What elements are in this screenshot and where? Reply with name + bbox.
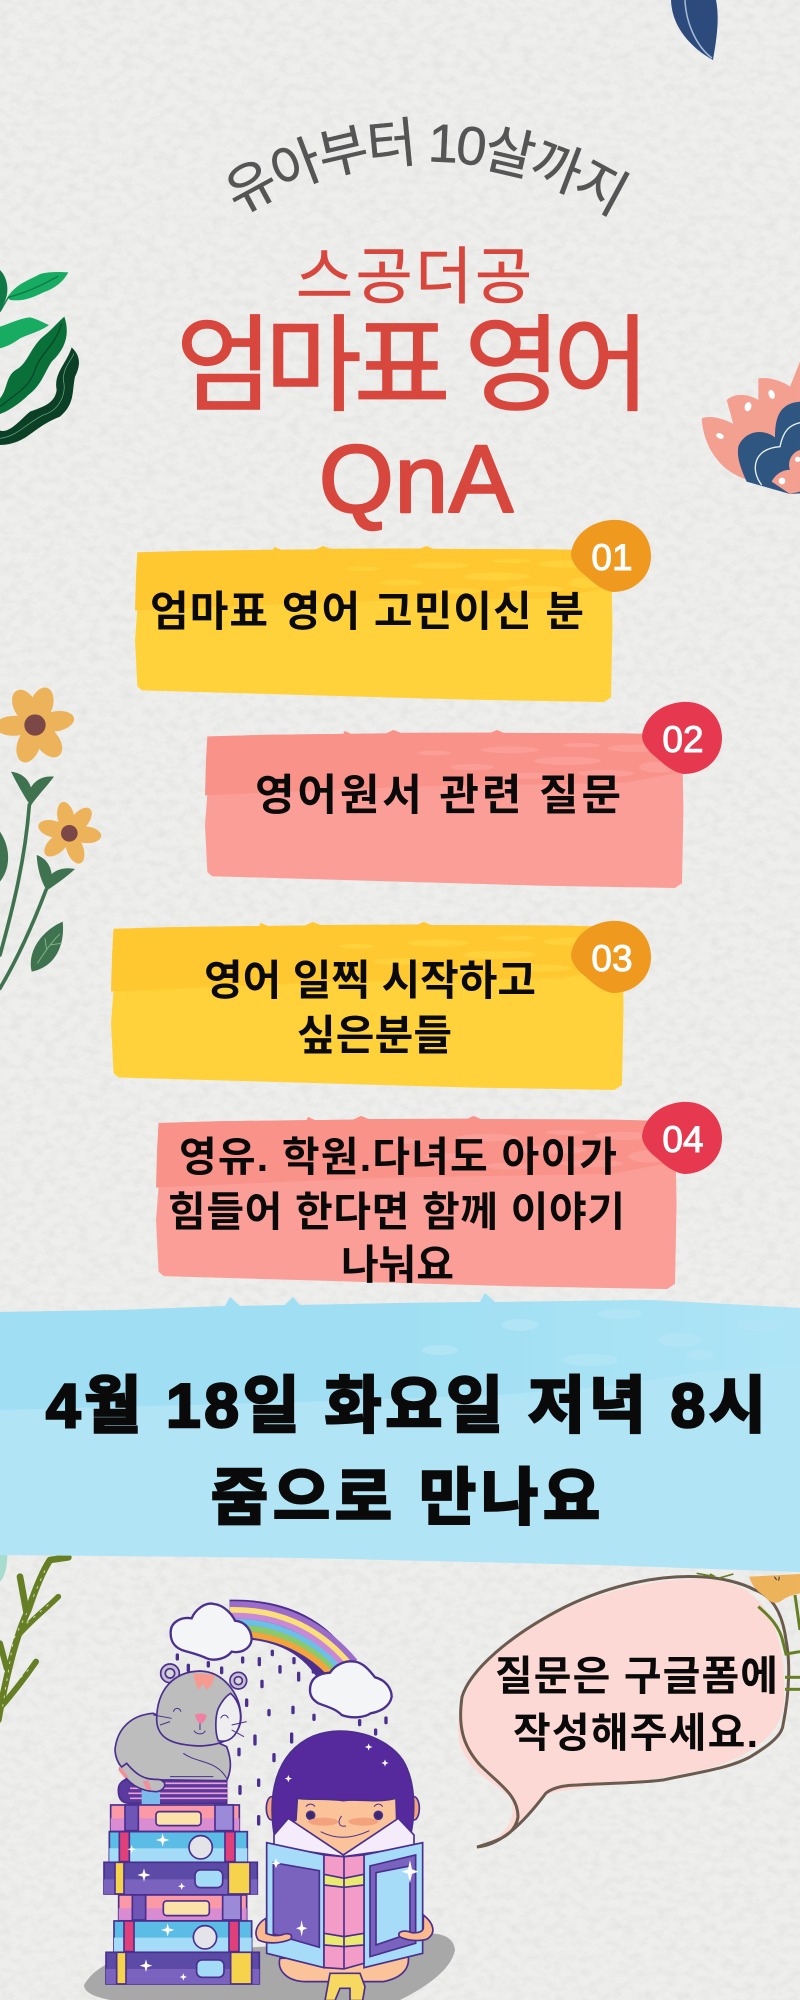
arms [256, 1918, 292, 1943]
illustration shadow [84, 1934, 455, 2000]
icon: salmon and navy flower right [702, 362, 800, 494]
badge: 04: 04 [662, 1119, 704, 1160]
icon: yellow flowers with stems left [0, 684, 102, 988]
book: purple one [104, 1862, 257, 1894]
illustration: book stack [104, 1778, 259, 1984]
book pages [274, 1818, 414, 1857]
book: blue two [114, 1921, 252, 1952]
book cover right [364, 1843, 423, 1968]
book: pink two [119, 1895, 247, 1920]
icon: green plant lower left [0, 1553, 68, 1720]
text: item 03: 영어 일찍 시작하고 [204, 957, 536, 1004]
badge: 02: 02 [662, 719, 704, 760]
title: QnA: QnA [319, 426, 513, 533]
speech bubble [458, 1577, 789, 1847]
face [293, 1790, 400, 1857]
text: item 04: 힘들어 한다면 함께 이야기 [168, 1189, 625, 1235]
book cover left [267, 1843, 324, 1968]
panel: item 04 [156, 1102, 722, 1289]
panel: blue date banner [0, 1293, 800, 1572]
text: item 03 [204, 957, 536, 1059]
badge: 02 [642, 702, 722, 774]
panel: item 03 [111, 921, 651, 1090]
badge: 04 [642, 1102, 722, 1174]
ears [266, 1797, 277, 1820]
subtitle: curved text: 유아부터 10살까지 [228, 116, 630, 217]
illustration: rainbow [230, 1604, 355, 1673]
illustration: girl reading [256, 1731, 433, 2000]
book: pink one [111, 1805, 239, 1831]
badge: 01 [571, 520, 651, 592]
text: item 04 [168, 1134, 625, 1288]
illustration: cloud left [171, 1604, 252, 1660]
badge: 03 [571, 921, 651, 993]
badge: 01: 01 [591, 537, 633, 578]
title: 엄마표 영어: 엄마표 영어 [176, 308, 650, 425]
illustration: cat [115, 1664, 247, 1792]
text: item 03: 싶은분들 [297, 1012, 452, 1059]
title: 스공더공: 스공더공 [296, 243, 532, 312]
icon: navy leaf top right [671, 0, 718, 60]
text: bubble line 1: 질문은 구글폼에 [495, 1653, 778, 1699]
shoes [325, 1973, 365, 2000]
panel: item 01 [135, 520, 651, 702]
text: bubble line 2: 작성해주세요. [513, 1710, 758, 1756]
text: date line: 4월 18일 화요일 저녁 8시 [46, 1372, 766, 1441]
book: blue one [109, 1832, 247, 1862]
text: item 04: 나눠요 [341, 1242, 454, 1288]
book: purple two [106, 1952, 259, 1984]
eyes and mouth [306, 1804, 383, 1837]
sparkles [271, 1743, 418, 1937]
legs [279, 1957, 408, 1982]
icon: plant and orange flower lower right [697, 1573, 800, 1689]
text: item 04: 영유. 학원.다녀도 아이가 [179, 1134, 617, 1180]
illustration: rain [177, 1651, 386, 1824]
book spine [324, 1855, 364, 1969]
hair [272, 1731, 414, 1835]
illustration: cloud right [310, 1661, 392, 1717]
icon: green seaweed leaves left [0, 270, 79, 445]
top small book [118, 1778, 228, 1811]
text: item 02: 영어원서 관련 질문 [255, 772, 621, 820]
badge: 03: 03 [591, 938, 633, 979]
panel: item 02 [205, 702, 722, 888]
sparkles on book stack [127, 1833, 187, 1981]
text: item 01: 엄마표 영어 고민이신 분 [150, 588, 584, 635]
text: zoom line: 줌으로 만나요 [211, 1464, 600, 1533]
